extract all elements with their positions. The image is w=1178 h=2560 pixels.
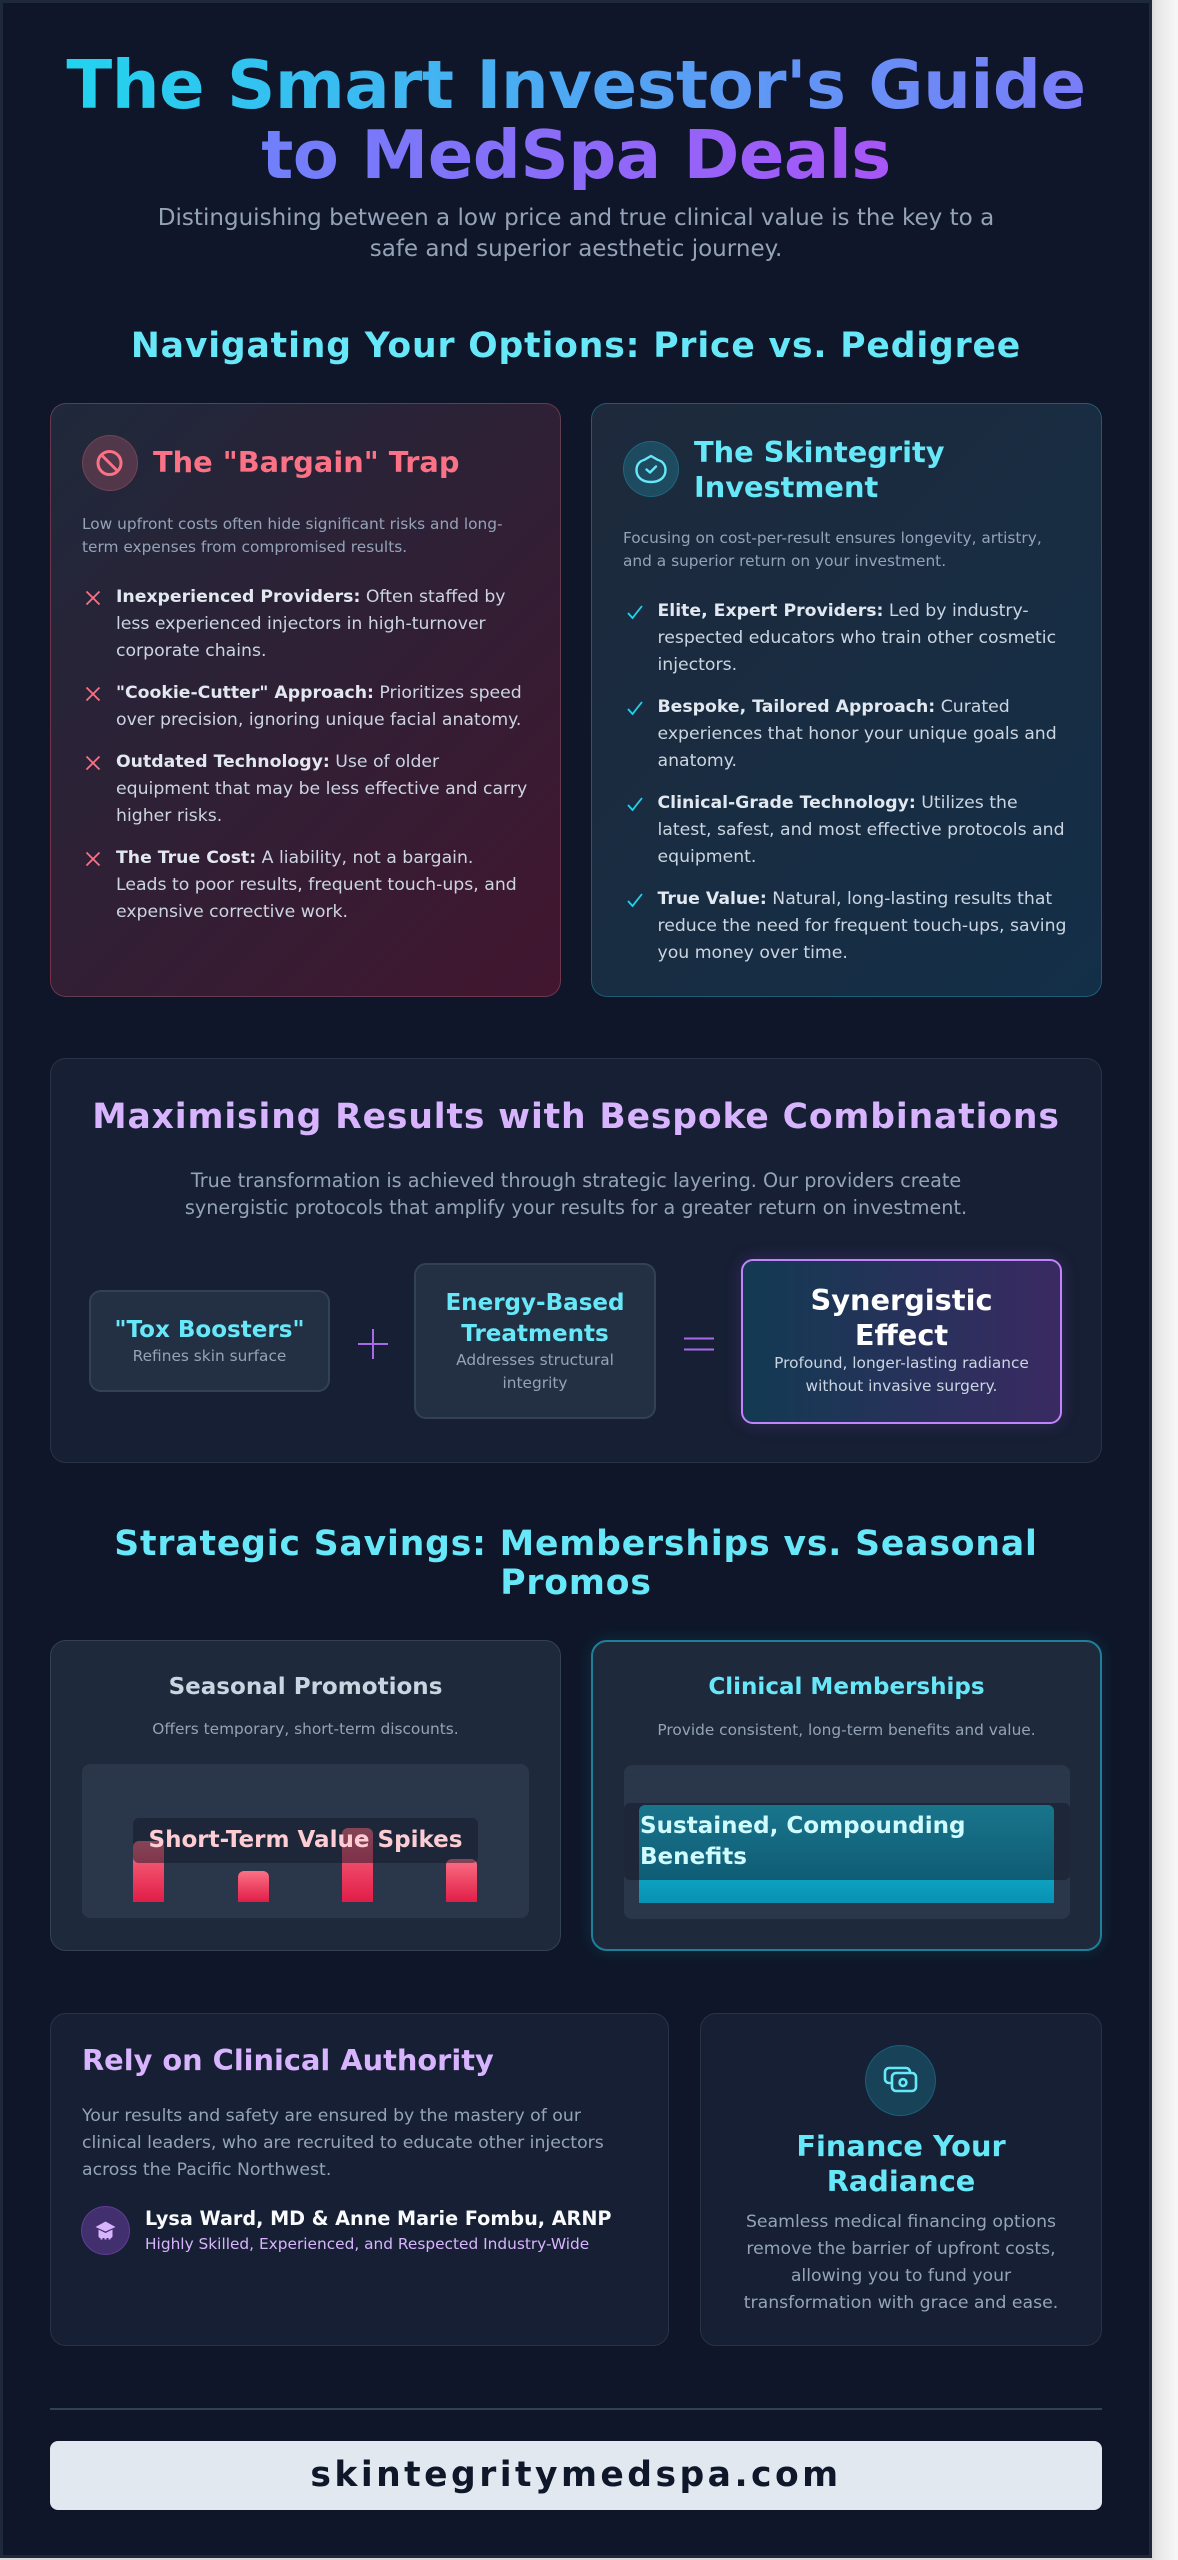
- text: synergistic detail: without invasive surgery.: [806, 1377, 997, 1395]
- text: synergistic detail: Profound, longer-lasting radiance: [774, 1354, 1029, 1372]
- heading: strategic savings: Strategic Savings: Memberships vs. Seasonal: [114, 1524, 1038, 1564]
- card: tox boosters: [89, 1290, 330, 1392]
- label: synergistic effect: [810, 1283, 993, 1352]
- bar: spike 4: [446, 1859, 477, 1902]
- item: cookie-cutter approach: over precision, ignoring unique facial anatomy.: [116, 710, 521, 730]
- subtitle: [158, 205, 994, 262]
- panel: clinical memberships: [591, 1640, 1102, 1951]
- item: cookie-cutter approach: [86, 683, 522, 730]
- panel: skintegrity investment: [591, 403, 1102, 997]
- button: website url: [50, 2441, 1102, 2510]
- item: elite providers: Elite, Expert Providers: Led by industry-: [658, 601, 1029, 621]
- item: bespoke approach: Bespoke, Tailored Approach: Curated: [658, 697, 1010, 717]
- item: cookie-cutter approach: "Cookie-Cutter" Approach: Prioritizes speed: [116, 683, 522, 703]
- text: skintegrity intro: and a superior return on your investment.: [623, 552, 946, 570]
- text: energy-based detail: integrity: [503, 1374, 567, 1392]
- label: energy-based treatments: [445, 1290, 625, 1347]
- icon: equals: [684, 1338, 714, 1350]
- label: short-term value spikes: [133, 1818, 478, 1863]
- label: sustained benefits: Benefits: [640, 1844, 747, 1870]
- card: synergistic effect: [741, 1259, 1062, 1424]
- text: combinations intro: synergistic protocols that amplify your results for a greater return on investment.: [185, 1196, 967, 1219]
- label: synergistic effect: Effect: [855, 1318, 948, 1352]
- heading: strategic savings: Promos: [500, 1563, 652, 1603]
- icon: graduation cap: [81, 2206, 130, 2255]
- item: inexperienced providers: corporate chains.: [116, 641, 266, 661]
- item: outdated technology: higher risks.: [116, 806, 222, 826]
- heading: skintegrity investment: Investment: [694, 470, 878, 504]
- panel: bespoke combinations: [50, 1058, 1102, 1463]
- bar: spike 2: [238, 1871, 269, 1902]
- item: true cost: The True Cost: A liability, not a bargain.: [116, 848, 473, 868]
- item: true cost: [86, 848, 517, 922]
- text: synergistic detail: [774, 1354, 1029, 1395]
- heading: finance your radiance: Radiance: [827, 2164, 975, 2198]
- text: authority detail: clinical leaders, who are recruited to educate other injectors: [82, 2133, 604, 2153]
- icon: banknotes: [865, 2045, 936, 2116]
- text: skintegrity intro: [623, 529, 1042, 570]
- heading: skintegrity investment: [694, 435, 944, 504]
- heading: clinical memberships: Clinical Memberships: [708, 1674, 985, 1700]
- item: bespoke approach: experiences that honor your unique goals and: [658, 724, 1057, 744]
- item: clinical-grade technology: [627, 793, 1065, 867]
- text: authority detail: across the Pacific Northwest.: [82, 2160, 331, 2180]
- heading: bargain trap: The "Bargain" Trap: [153, 445, 459, 479]
- panel: seasonal promotions: [50, 1640, 561, 1951]
- card: energy-based treatments: [414, 1263, 656, 1419]
- label: sustained benefits: [624, 1803, 1070, 1880]
- text: energy-based detail: [456, 1351, 614, 1392]
- text: finance detail: Seamless medical financing options: [746, 2212, 1056, 2232]
- item: inexperienced providers: less experienced injectors in high-turnover: [116, 614, 486, 634]
- text: combinations intro: True transformation is achieved through strategic layering. Our providers create: [191, 1169, 961, 1192]
- panel: bargain trap: [50, 403, 561, 997]
- panel: finance your radiance: [700, 2013, 1102, 2346]
- label: synergistic effect: Synergistic: [810, 1283, 993, 1317]
- icon: timer check: [623, 441, 679, 497]
- item: true value: True Value: Natural, long-lasting results that: [658, 889, 1052, 909]
- text: tox boosters detail: Refines skin surface: [133, 1347, 286, 1365]
- item: outdated technology: [86, 752, 527, 826]
- text: bargain intro: term expenses from compromised results.: [82, 538, 407, 556]
- bar: sustained value: [639, 1805, 1054, 1903]
- item: bespoke approach: anatomy.: [658, 751, 737, 771]
- label: sustained benefits: Sustained, Compounding: [640, 1812, 966, 1838]
- heading: bespoke combinations: Maximising Results with Bespoke Combinations: [92, 1097, 1060, 1137]
- label: energy-based treatments: Energy-Based: [445, 1290, 625, 1316]
- heading: finance your radiance: Finance Your: [796, 2129, 1006, 2163]
- chart: short-term spikes: [82, 1764, 529, 1918]
- item: true cost: Leads to poor results, frequent touch-ups, and: [116, 875, 517, 895]
- text: skintegrity intro: Focusing on cost-per-result ensures longevity, artistry,: [623, 529, 1042, 547]
- text: bargain intro: [82, 515, 503, 556]
- item: true value: you money over time.: [658, 943, 848, 963]
- title: to MedSpa Deals: [261, 116, 891, 194]
- item: clinical-grade technology: latest, safest, and most effective protocols and: [658, 820, 1065, 840]
- subtitle: safe and superior aesthetic journey.: [370, 236, 782, 262]
- panel: clinical authority: [50, 2013, 669, 2346]
- text: authority detail: [82, 2106, 604, 2180]
- item: clinical-grade technology: Clinical-Grade Technology: Utilizes the: [658, 793, 1018, 813]
- label: tox boosters: "Tox Boosters": [115, 1317, 304, 1343]
- button: website url: skintegritymedspa.com: [310, 2455, 842, 2495]
- heading: price vs pedigree: Navigating Your Options: Price vs. Pedigree: [131, 326, 1021, 366]
- text: authority detail: Your results and safety are ensured by the mastery of our: [82, 2106, 581, 2126]
- label: short-term value spikes: Short-Term Value Spikes: [148, 1827, 463, 1853]
- item: elite providers: injectors.: [658, 655, 737, 675]
- chart: sustained benefits: [624, 1765, 1070, 1919]
- text: finance detail: remove the barrier of upfront costs,: [746, 2239, 1056, 2259]
- heading: finance your radiance: [796, 2129, 1006, 2198]
- heading: strategic savings: [114, 1524, 1038, 1603]
- text: energy-based detail: Addresses structural: [456, 1351, 614, 1369]
- text: seasonal detail: Offers temporary, short-term discounts.: [152, 1720, 459, 1738]
- bar: spike 3: [342, 1828, 373, 1902]
- item: inexperienced providers: [86, 587, 506, 661]
- heading: clinical authority: Rely on Clinical Authority: [82, 2043, 494, 2077]
- text: combinations intro: [185, 1169, 967, 1219]
- text: finance detail: [744, 2212, 1058, 2313]
- text: leaders credentials: Highly Skilled, Experienced, and Respected Industry-Wide: [145, 2235, 589, 2253]
- item: clinical-grade technology: equipment.: [658, 847, 756, 867]
- bar: spike 1: [133, 1841, 164, 1902]
- subtitle: Distinguishing between a low price and true clinical value is the key to a: [158, 205, 994, 231]
- divider: [50, 2408, 1102, 2410]
- item: elite providers: respected educators who train other cosmetic: [658, 628, 1056, 648]
- heading: skintegrity investment: The Skintegrity: [694, 435, 944, 469]
- text: clinical leaders: Lysa Ward, MD & Anne Marie Fombu, ARNP: [145, 2207, 611, 2230]
- icon: plus: [358, 1329, 388, 1359]
- item: outdated technology: equipment that may be less effective and carry: [116, 779, 527, 799]
- item: inexperienced providers: Inexperienced Providers: Often staffed by: [116, 587, 506, 607]
- item: elite providers: [627, 601, 1056, 675]
- icon: prohibited: [82, 435, 138, 491]
- text: memberships detail: Provide consistent, long-term benefits and value.: [657, 1721, 1036, 1739]
- title: The Smart Investor's Guide: [66, 46, 1086, 124]
- item: true cost: expensive corrective work.: [116, 902, 348, 922]
- item: true value: reduce the need for frequent touch-ups, saving: [658, 916, 1066, 936]
- heading: seasonal promotions: Seasonal Promotions: [169, 1674, 442, 1700]
- label: energy-based treatments: Treatments: [461, 1321, 609, 1347]
- item: outdated technology: Outdated Technology: Use of older: [116, 752, 439, 772]
- text: finance detail: transformation with grace and ease.: [744, 2293, 1058, 2313]
- item: bespoke approach: [627, 697, 1057, 771]
- text: finance detail: allowing you to fund your: [791, 2266, 1011, 2286]
- title: [66, 46, 1086, 194]
- text: bargain intro: Low upfront costs often hide significant risks and long-: [82, 515, 503, 533]
- item: true value: [627, 889, 1066, 963]
